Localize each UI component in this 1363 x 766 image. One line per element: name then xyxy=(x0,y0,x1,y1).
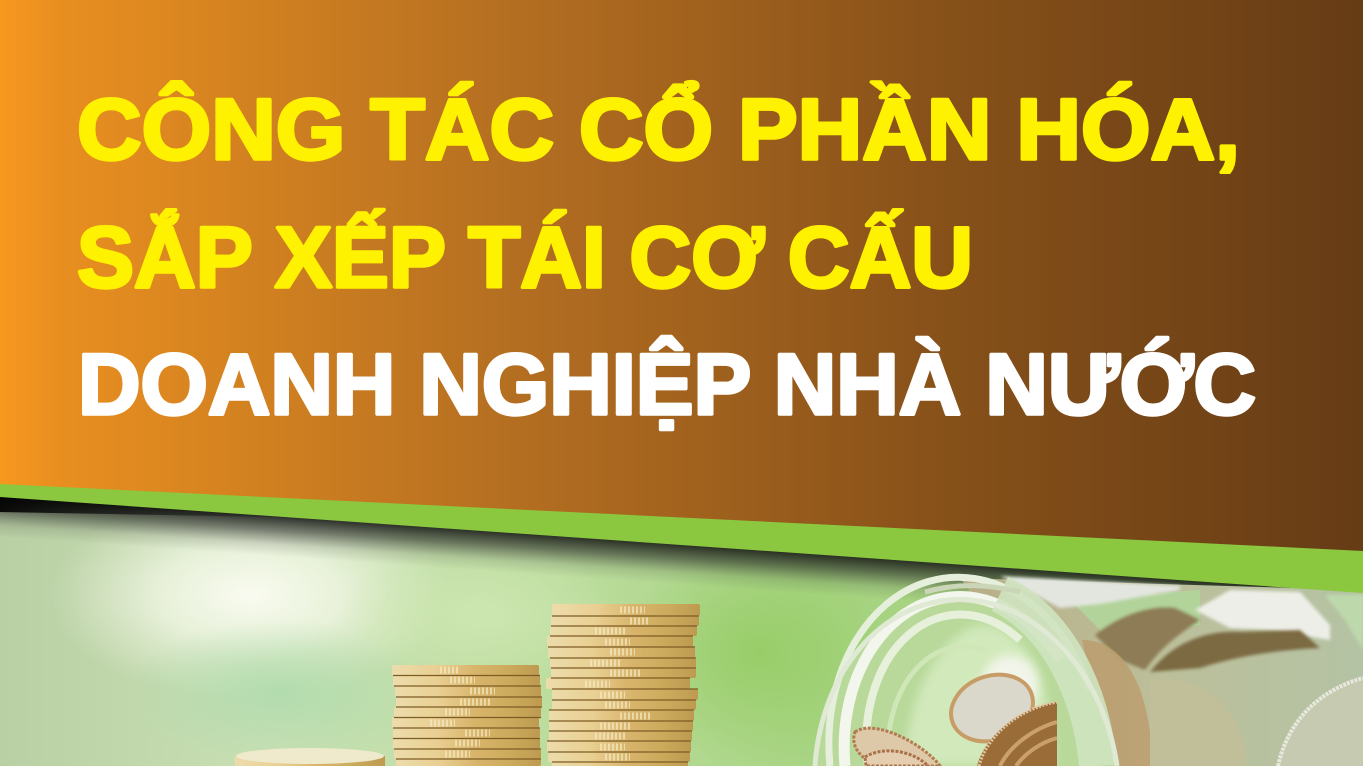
jar rim: outer edge xyxy=(815,599,1117,766)
title line 2: SẮP XẾP TÁI CƠ CẤU xyxy=(77,210,973,306)
jar: pale right glass xyxy=(1325,595,1363,650)
jar mouth: streak rings xyxy=(829,577,1090,766)
coin: silver face xyxy=(942,664,1042,752)
coin in jar: right edge xyxy=(1278,680,1363,766)
jar body xyxy=(960,578,1363,766)
jar: white patch xyxy=(1195,590,1330,640)
jar rim: top thread xyxy=(925,586,1020,592)
jar: white highlight strip xyxy=(1000,576,1180,608)
coin in jar: large faded xyxy=(1150,679,1246,766)
title xyxy=(77,82,1256,433)
coins in jar: back xyxy=(1095,607,1200,670)
coin: copper stack xyxy=(977,702,1057,766)
coin: left pile xyxy=(854,728,940,766)
title line 3: DOANH NGHIỆP NHÀ NƯỚC xyxy=(78,337,1256,433)
jar rim: right thick glass xyxy=(1000,594,1098,766)
coin stack: tall xyxy=(546,604,700,766)
green diagonal band xyxy=(0,484,1363,593)
photo background: blurred green bokeh xyxy=(0,480,1363,766)
coin: left pile lower xyxy=(865,751,928,766)
coin in jar: wall xyxy=(1082,640,1152,766)
header panel with gradient xyxy=(0,0,1363,552)
jar mouth xyxy=(815,599,1117,766)
title line 1: CÔNG TÁC CỔ PHẦN HÓA, xyxy=(77,82,1240,178)
coin stack: middle xyxy=(392,665,542,766)
jar: greenish glass top xyxy=(1070,590,1200,640)
small coin stack xyxy=(235,748,385,766)
glass jar with coins xyxy=(815,576,1363,766)
jar mouth: white glare xyxy=(982,655,1038,715)
jar mouth: inner light xyxy=(905,625,1055,766)
